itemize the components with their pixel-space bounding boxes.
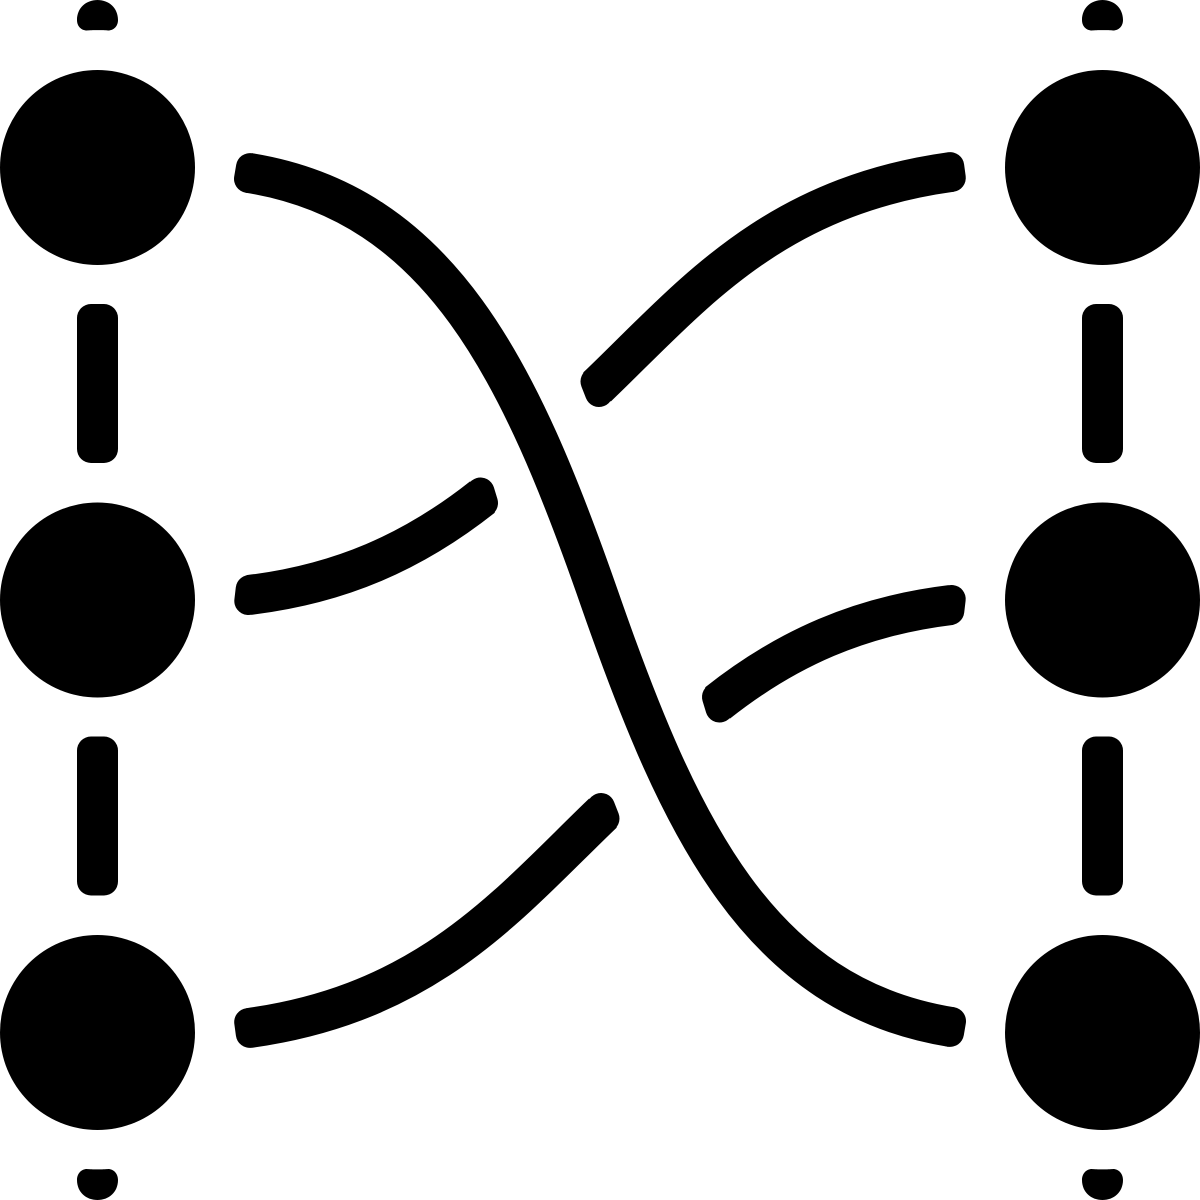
left node chain — [0, 0, 195, 1200]
left top stub — [77, 0, 118, 30]
upper right strand — [594, 166, 952, 393]
middle right strand — [716, 599, 952, 708]
right top stub — [1082, 0, 1123, 30]
main crossing strand — [248, 167, 952, 1033]
strands — [248, 166, 952, 1034]
middle left strand — [248, 492, 484, 601]
right node chain — [1005, 0, 1200, 1200]
lower left strand — [248, 807, 605, 1034]
